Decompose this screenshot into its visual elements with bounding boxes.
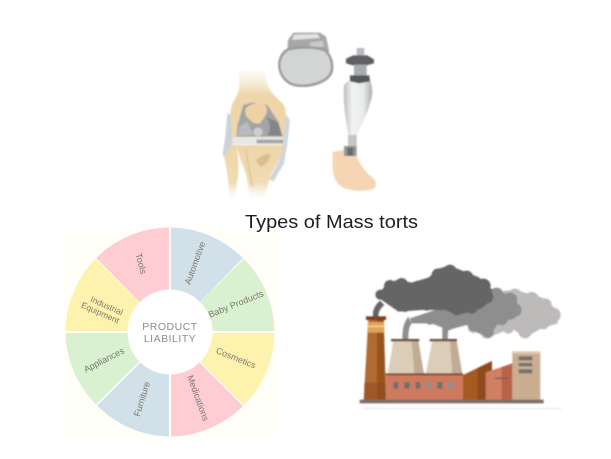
segment: Tools	[96, 228, 169, 332]
chimney	[364, 316, 386, 400]
segment: Baby Products	[171, 259, 274, 331]
segment: Furniture	[97, 334, 169, 436]
segment: Appliances	[66, 333, 168, 404]
center hub	[128, 290, 212, 374]
illustration: medical implants	[223, 33, 376, 198]
segment: Cosmetics	[171, 333, 274, 405]
sawtooth annex	[463, 361, 512, 400]
icon: knee implant	[223, 71, 290, 198]
label: Cosmetics: Cosmetics	[215, 345, 258, 371]
smoke: dark cloud	[373, 265, 493, 317]
illustration: factory	[360, 265, 562, 409]
label: Appliances: Appliances	[82, 345, 126, 374]
smoke: medium cloud	[402, 288, 522, 340]
icon: prosthetic leg	[333, 48, 376, 191]
label: Industrial Equipment: Industrial	[89, 294, 125, 317]
cooling towers	[388, 339, 462, 374]
segment: Medications	[171, 334, 243, 436]
label: Furniture: Furniture	[132, 380, 152, 418]
wheel labels	[80, 240, 265, 423]
icon: pacemaker	[278, 33, 333, 87]
label: Liability: LIABILITY	[144, 333, 196, 345]
ground	[360, 400, 544, 403]
panel: product liability wheel background	[63, 229, 277, 438]
label: Medications: Medications	[185, 374, 211, 423]
office block	[512, 351, 540, 400]
label: Product: PRODUCT	[142, 321, 198, 333]
label: Baby Products: Baby Products	[207, 288, 265, 320]
smoke: light cloud	[468, 289, 561, 339]
chart: product liability wheel	[66, 228, 274, 436]
title: Types of Mass torts	[245, 212, 418, 232]
segment: Automotive	[171, 228, 243, 332]
segment: Industrial Equipment	[66, 259, 168, 331]
label: Automotive: Automotive	[183, 240, 207, 286]
label: Industrial Equipment: Equipment	[80, 300, 122, 326]
label: Tools: Tools	[133, 252, 149, 275]
factory hall	[386, 373, 463, 400]
